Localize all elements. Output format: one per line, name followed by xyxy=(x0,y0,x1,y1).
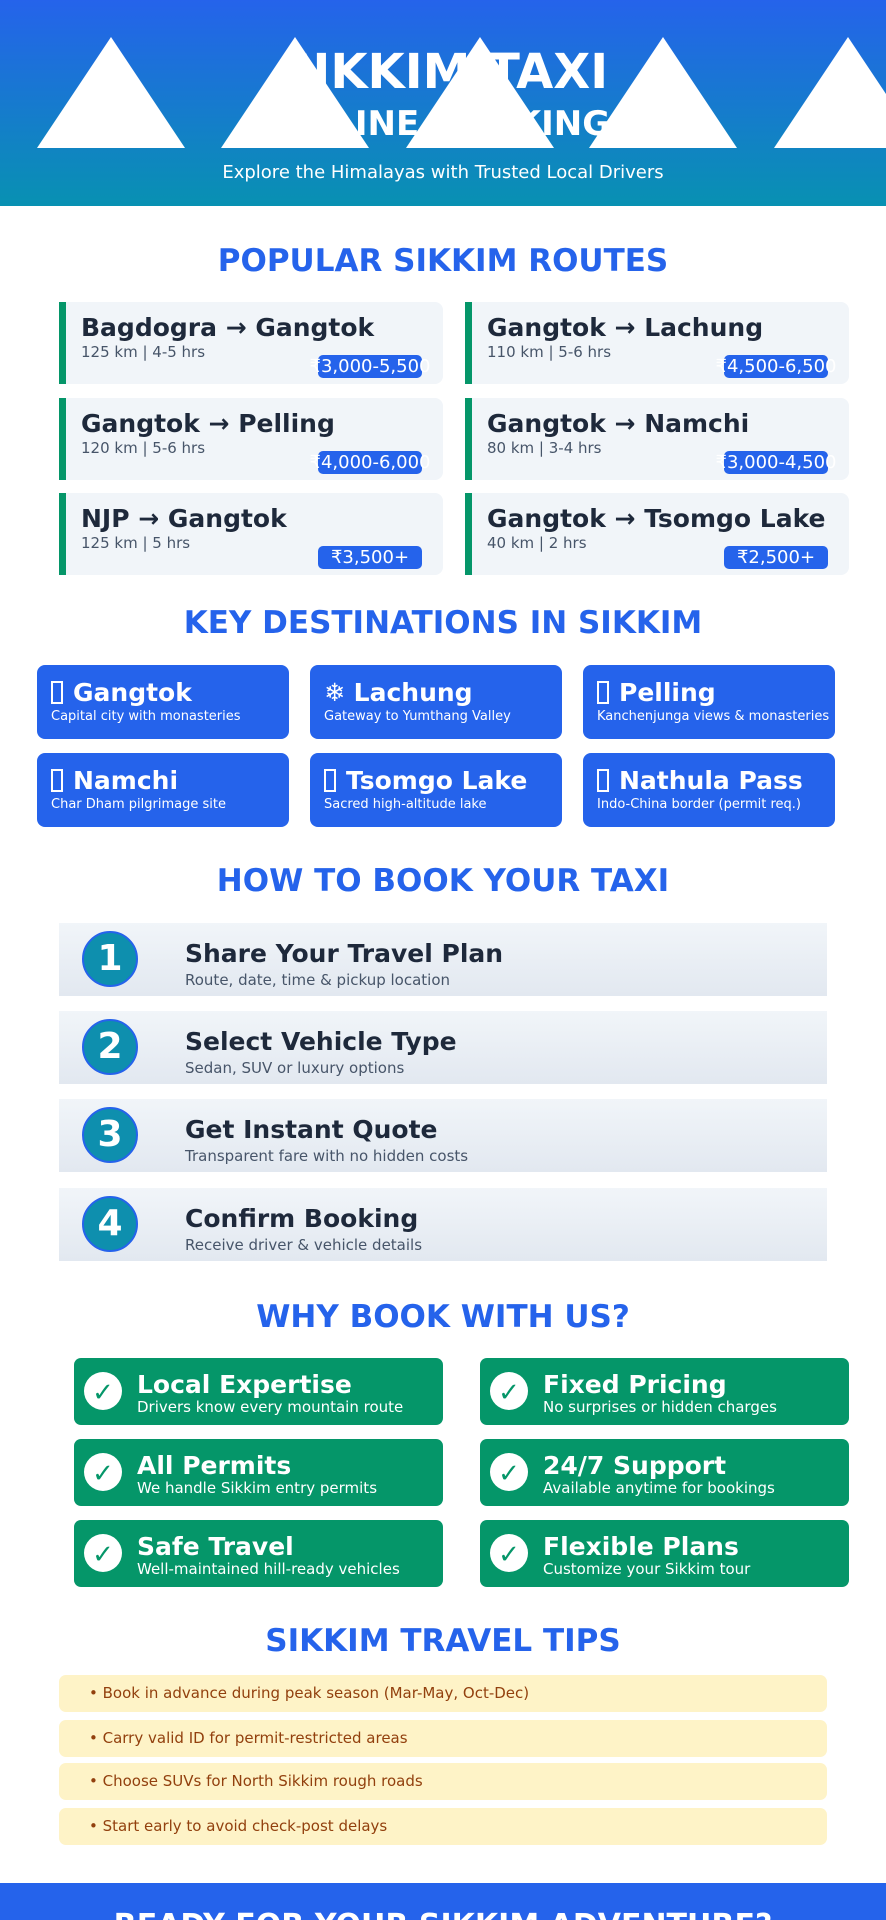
benefit: safe travel xyxy=(74,1520,443,1587)
route card 4: ₹3,000-4,500 xyxy=(715,452,837,473)
route card 4: Gangtok → Namchi xyxy=(487,409,749,438)
subtitle: online booking: ONLINE BOOKING xyxy=(276,104,610,144)
panel: destinations xyxy=(37,665,835,827)
benefit: flexible plans: Flexible Plans xyxy=(543,1532,739,1561)
benefit: fixed pricing xyxy=(480,1358,849,1425)
route card 2: 110 km | 5-6 hrs xyxy=(487,343,611,361)
benefit: permits: ✓ xyxy=(92,1459,114,1489)
benefit: permits: We handle Sikkim entry permits xyxy=(137,1479,377,1497)
benefit: support: ✓ xyxy=(498,1459,520,1489)
benefit: permits xyxy=(74,1439,443,1506)
benefit: local expertise: ✓ xyxy=(92,1378,114,1408)
benefit: fixed pricing: No surprises or hidden charges xyxy=(543,1398,777,1416)
benefit: fixed pricing: Fixed Pricing xyxy=(543,1370,727,1399)
destination: Nathula Pass: Nathula Pass xyxy=(619,766,803,795)
benefit: support: Available anytime for bookings xyxy=(543,1479,775,1497)
tip 1: • Book in advance during peak season (Mar-May, Oct-Dec) xyxy=(89,1684,529,1702)
step 2 xyxy=(59,1011,827,1084)
benefit: local expertise: Drivers know every mountain route xyxy=(137,1398,403,1416)
title: SIKKIM TAXI xyxy=(278,44,608,100)
heading: key destinations: KEY DESTINATIONS IN SIKKIM xyxy=(184,605,702,641)
step 3 xyxy=(59,1099,827,1172)
benefit: support: 24/7 Support xyxy=(543,1451,726,1480)
step 2: 2 xyxy=(97,1026,123,1067)
destination: Nathula Pass xyxy=(583,753,835,827)
route card 5: NJP → Gangtok xyxy=(81,504,287,533)
tip 3: • Choose SUVs for North Sikkim rough roads xyxy=(89,1772,423,1790)
step 3: Get Instant Quote xyxy=(185,1115,438,1144)
route card 6: Gangtok → Tsomgo Lake xyxy=(487,504,826,533)
benefit: local expertise xyxy=(74,1358,443,1425)
benefit: safe travel: ✓ xyxy=(92,1540,114,1570)
route card 4: 80 km | 3-4 hrs xyxy=(487,439,602,457)
step 1: 1 xyxy=(97,938,123,979)
step 2: Sedan, SUV or luxury options xyxy=(185,1059,404,1077)
destination: Pelling: Pelling xyxy=(619,678,716,707)
route card 3: ₹4,000-6,000 xyxy=(309,452,431,473)
benefit: permits: All Permits xyxy=(137,1451,291,1480)
panel: tips xyxy=(59,1675,827,1845)
destination: Gangtok: Capital city with monasteries xyxy=(51,709,241,724)
destination: Tsomgo Lake: Sacred high-altitude lake xyxy=(324,797,486,812)
tip 3 xyxy=(59,1763,827,1800)
step 4: 4 xyxy=(97,1203,123,1244)
destination: Tsomgo Lake xyxy=(310,753,562,827)
destination: Pelling xyxy=(583,665,835,739)
route card 6: 40 km | 2 hrs xyxy=(487,534,587,552)
heading: popular routes: POPULAR SIKKIM ROUTES xyxy=(218,243,668,279)
route card 2: Gangtok → Lachung xyxy=(487,313,763,342)
tip 4 xyxy=(59,1808,827,1845)
step 1: Route, date, time & pickup location xyxy=(185,971,450,989)
step 3: Transparent fare with no hidden costs xyxy=(185,1147,468,1165)
panel: steps xyxy=(59,923,827,1261)
destination: Namchi xyxy=(37,753,289,827)
heading: why book: WHY BOOK WITH US? xyxy=(256,1299,630,1335)
route card 5: ₹3,500+ xyxy=(331,547,409,568)
tip 4: • Start early to avoid check-post delays xyxy=(89,1817,387,1835)
route card 1 xyxy=(59,302,443,384)
footer call to action xyxy=(0,1883,886,1920)
route card 2: ₹4,500-6,500 xyxy=(715,356,837,377)
benefit: flexible plans: Customize your Sikkim tour xyxy=(543,1560,750,1578)
step 2: Select Vehicle Type xyxy=(185,1027,457,1056)
heading: travel tips: SIKKIM TRAVEL TIPS xyxy=(265,1623,621,1659)
destination: Gangtok: Gangtok xyxy=(73,678,192,707)
mountains icon row xyxy=(37,37,886,148)
benefit: flexible plans xyxy=(480,1520,849,1587)
step 3: 3 xyxy=(97,1114,123,1155)
route card 5: 125 km | 5 hrs xyxy=(81,534,190,552)
benefit: fixed pricing: ✓ xyxy=(498,1378,520,1408)
heading: how to book: HOW TO BOOK YOUR TAXI xyxy=(217,863,669,899)
route card 3: 120 km | 5-6 hrs xyxy=(81,439,205,457)
benefit: support xyxy=(480,1439,849,1506)
destination: Lachung xyxy=(310,665,562,739)
destination: Tsomgo Lake: Tsomgo Lake xyxy=(346,766,527,795)
destination: Lachung: ❄ Lachung xyxy=(324,678,473,707)
route card 4 xyxy=(465,398,849,480)
tip 1 xyxy=(59,1675,827,1712)
panel: benefits xyxy=(74,1358,849,1587)
step 1 xyxy=(59,923,827,996)
route card 3: Gangtok → Pelling xyxy=(81,409,335,438)
destination: Gangtok xyxy=(37,665,289,739)
destination: Nathula Pass: Indo-China border (permit req.) xyxy=(597,797,801,812)
route card 3 xyxy=(59,398,443,480)
route card 1: Bagdogra → Gangtok xyxy=(81,313,374,342)
route card 6 xyxy=(465,493,849,575)
route card 1: 125 km | 4-5 hrs xyxy=(81,343,205,361)
tagline: Explore the Himalayas with Trusted Local Drivers xyxy=(222,162,664,183)
destination: Pelling: Kanchenjunga views & monasteries xyxy=(597,709,829,724)
benefit: local expertise: Local Expertise xyxy=(137,1370,352,1399)
route card 1: ₹3,000-5,500 xyxy=(309,356,431,377)
destination: Namchi: Char Dham pilgrimage site xyxy=(51,797,226,812)
benefit: safe travel: Well-maintained hill-ready vehicles xyxy=(137,1560,400,1578)
benefit: flexible plans: ✓ xyxy=(498,1540,520,1570)
step 4: Confirm Booking xyxy=(185,1204,418,1233)
panel: routes xyxy=(59,302,849,575)
tip 2 xyxy=(59,1720,827,1757)
header banner xyxy=(0,0,886,206)
step 4: Receive driver & vehicle details xyxy=(185,1236,422,1254)
destination: Lachung: Gateway to Yumthang Valley xyxy=(324,709,511,724)
route card 2 xyxy=(465,302,849,384)
route card 6: ₹2,500+ xyxy=(737,547,815,568)
step 1: Share Your Travel Plan xyxy=(185,939,503,968)
step 4 xyxy=(59,1188,827,1261)
destination: Namchi: Namchi xyxy=(73,766,178,795)
route card 5 xyxy=(59,493,443,575)
benefit: safe travel: Safe Travel xyxy=(137,1532,294,1561)
tip 2: • Carry valid ID for permit-restricted areas xyxy=(89,1729,408,1747)
